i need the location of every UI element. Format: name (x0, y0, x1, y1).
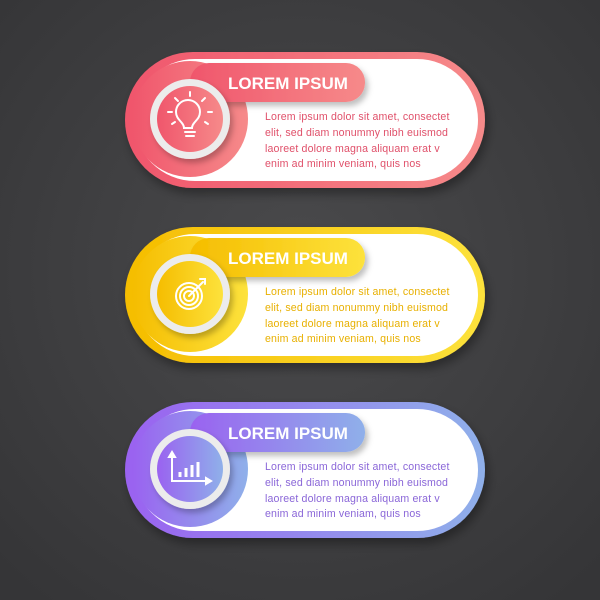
text block: elit, sed diam nonummy nibh euismod (265, 127, 448, 139)
text block (265, 461, 450, 520)
heading: LOREM IPSUM (228, 424, 348, 443)
panel: yellow target (125, 227, 485, 363)
text block: laoreet dolore magna aliquam erat v (265, 143, 440, 155)
text block: enim ad minim veniam, quis nos (265, 508, 421, 520)
icon: bar chart (169, 452, 211, 484)
panel: red lightbulb (125, 52, 485, 188)
text block: Lorem ipsum dolor sit amet, consectet (265, 461, 450, 473)
text block (265, 286, 450, 345)
heading: LOREM IPSUM (228, 74, 348, 93)
text block: enim ad minim veniam, quis nos (265, 158, 421, 170)
heading: LOREM IPSUM (228, 249, 348, 268)
icon: target (176, 279, 205, 309)
text block: laoreet dolore magna aliquam erat v (265, 318, 440, 330)
text block: Lorem ipsum dolor sit amet, consectet (265, 286, 450, 298)
text block: elit, sed diam nonummy nibh euismod (265, 477, 448, 489)
text block: laoreet dolore magna aliquam erat v (265, 493, 440, 505)
icon: lightbulb (168, 92, 212, 136)
text block: elit, sed diam nonummy nibh euismod (265, 302, 448, 314)
text block (265, 111, 450, 170)
panel: purple chart (125, 402, 485, 538)
text block: Lorem ipsum dolor sit amet, consectet (265, 111, 450, 123)
text block: enim ad minim veniam, quis nos (265, 333, 421, 345)
